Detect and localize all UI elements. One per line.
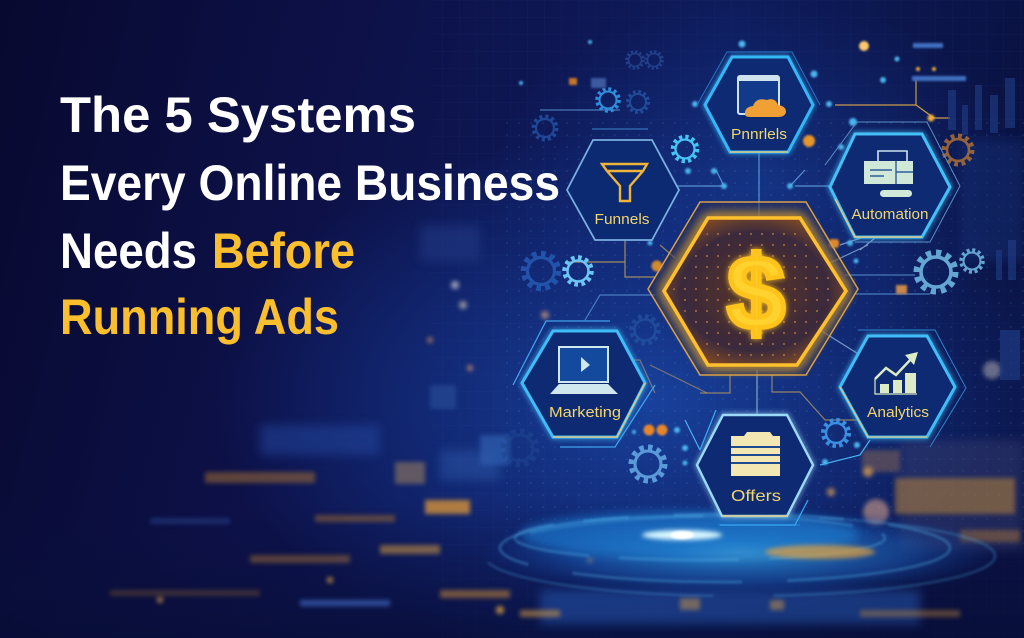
circuit lines <box>540 80 950 525</box>
label: Automation <box>852 206 928 223</box>
hexagon: central dollar <box>648 202 858 375</box>
node dots and small icons <box>519 40 1020 466</box>
title: Before <box>212 223 355 279</box>
icon: funnel <box>602 164 647 201</box>
title: Needs <box>60 223 197 279</box>
title: Every Online Business <box>60 155 560 211</box>
hexagon: analytics <box>840 330 966 447</box>
title: Running Ads <box>60 289 339 345</box>
icon: dollar sign: $ <box>727 236 785 352</box>
hexagon: offers <box>697 410 813 525</box>
gears <box>503 52 983 481</box>
icon: browser and cloud <box>738 76 786 117</box>
hexagon: automation <box>825 122 960 242</box>
hexagon: marketing <box>513 321 655 447</box>
icon: laptop <box>550 347 618 394</box>
title <box>60 87 560 345</box>
label: Funnels <box>594 211 650 228</box>
label: Offers <box>731 488 781 505</box>
hexagon: top system <box>697 52 820 152</box>
platform: holographic disc <box>478 506 1002 598</box>
icon: rising chart <box>875 352 918 394</box>
label: Analytics <box>867 404 929 421</box>
icon: briefcase terminal <box>864 151 913 197</box>
bokeh particles: bottom city lights <box>110 140 1024 624</box>
icon: offer list <box>731 432 780 476</box>
label: Pnnrlels <box>731 126 787 143</box>
hexagon: funnels <box>567 129 679 240</box>
label: Marketing <box>549 404 621 421</box>
title: The 5 Systems <box>60 87 416 143</box>
